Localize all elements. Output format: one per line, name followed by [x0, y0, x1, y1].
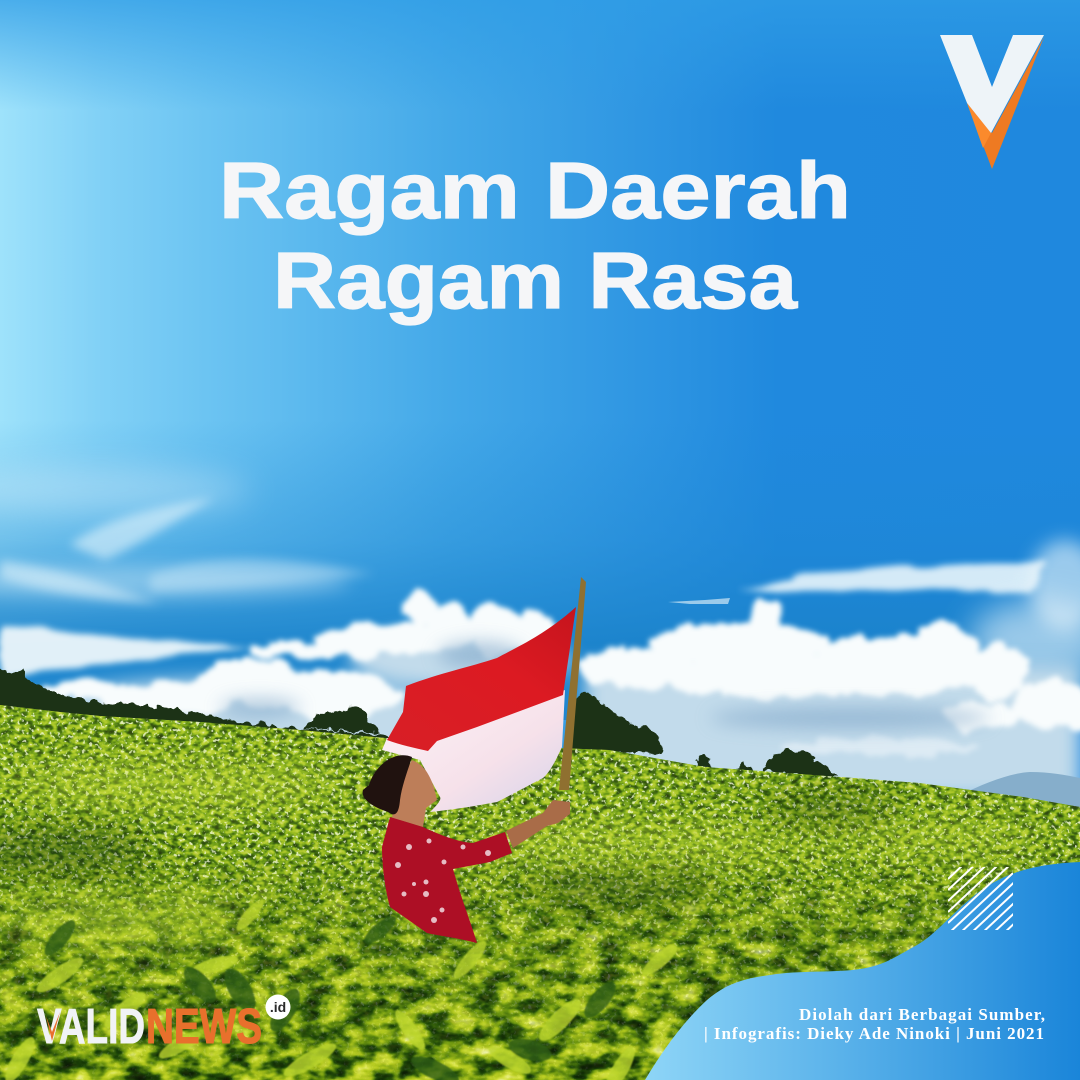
flag: red stripe: [387, 607, 576, 751]
foreground leaves: [0, 896, 681, 1080]
distant mountain: [960, 772, 1080, 812]
title: [219, 146, 851, 325]
VALIDNEWS logo: [37, 994, 290, 1054]
right cloud: [748, 599, 782, 633]
tea field: [0, 690, 1080, 1080]
upper cloud left of flag: [401, 589, 439, 627]
woman holding flag: [363, 755, 570, 943]
cumulus cloud bank: [20, 589, 1080, 800]
VALIDNEWS logo: NEWS: [146, 1000, 262, 1054]
title: Ragam Daerah: [219, 146, 851, 235]
wispy clouds left: [0, 466, 375, 675]
title: Ragam Rasa: [273, 236, 798, 325]
source credit: [704, 1005, 1045, 1043]
tree line: [0, 668, 838, 778]
flag and pole: [382, 577, 586, 812]
flag pole: [559, 577, 586, 790]
source credit: Diolah dari Berbagai Sumber,: [799, 1005, 1045, 1024]
decorative stripes: [948, 867, 1013, 930]
neck and face: [392, 760, 437, 827]
brand V logo: [940, 35, 1044, 169]
arm: [506, 800, 570, 848]
flag: white stripe: [382, 690, 565, 812]
VALIDNEWS logo: VALID: [37, 1000, 145, 1054]
dress dots: [395, 838, 491, 923]
hair: [363, 755, 412, 814]
VALIDNEWS logo: .id: [270, 999, 286, 1015]
footer wave panel: [645, 862, 1080, 1080]
source credit: | Infografis: Dieky Ade Ninoki | Juni 2021: [704, 1024, 1044, 1043]
wispy cloud right: [668, 540, 1080, 680]
lower cloud left: [200, 656, 300, 704]
red dress: [382, 817, 512, 943]
sky background: [0, 0, 1080, 830]
